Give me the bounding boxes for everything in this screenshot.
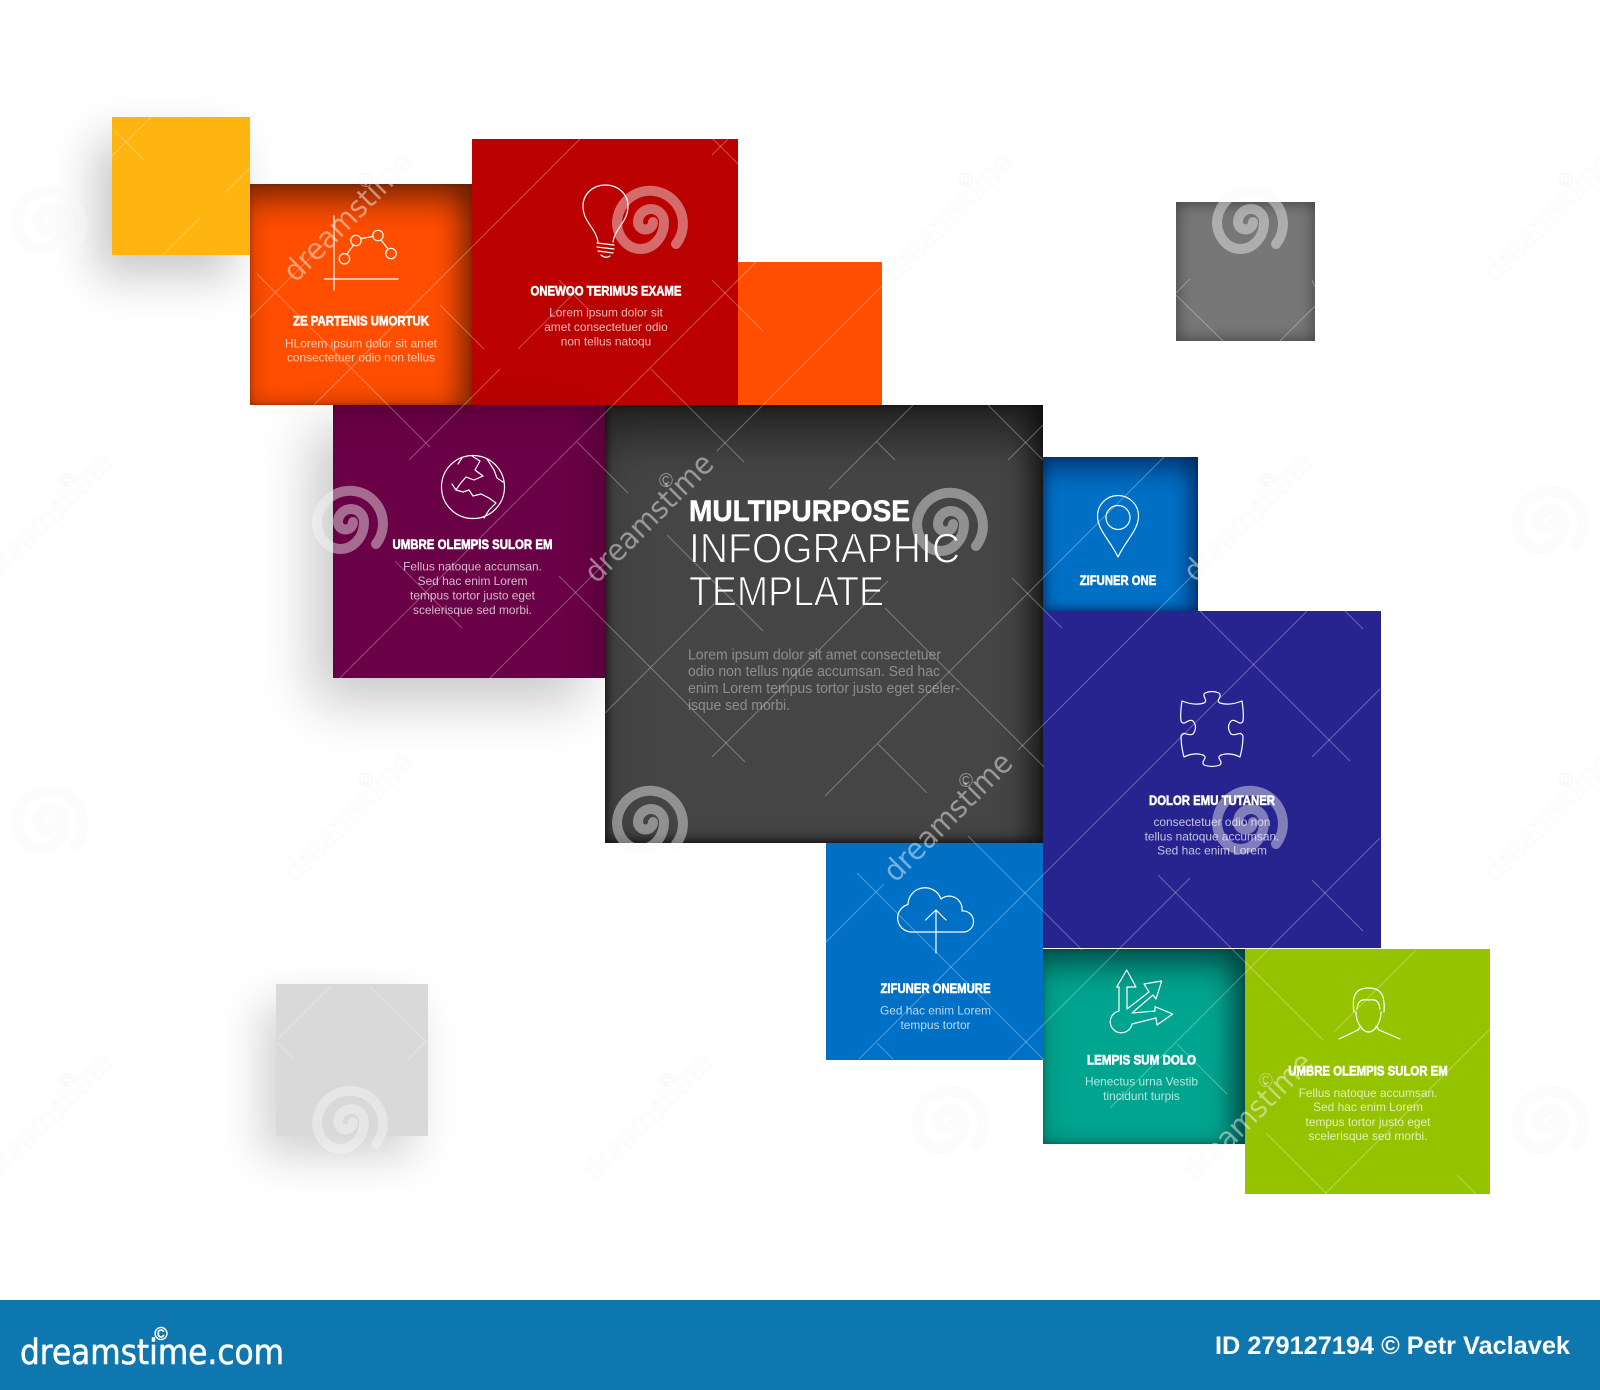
text block: green description: tempus tortor justo eget [1306,1115,1431,1129]
text block: purple description: Sed hac enim Lorem [418,574,527,588]
text block: teal description: tincidunt turpis [1103,1089,1180,1103]
text block: title description [688,648,960,714]
panel: dark title card [605,405,1043,843]
text block: orange description: HLorem ipsum dolor sit amet [285,336,438,350]
watermark overlay: © [59,471,73,492]
watermark overlay: © [359,771,373,792]
heading: main title [689,495,960,614]
heading: main title: TEMPLATE [689,568,884,614]
text block: purple description: scelerisque sed morbi. [413,603,532,617]
panel: dark gray square [1176,202,1315,341]
panel: yellow square [112,117,250,255]
icon: light bulb [583,185,628,257]
icon: puzzle piece [1181,692,1243,766]
text block: indigo description: tellus natoque accumsan. [1145,830,1279,844]
heading: umbre olempis sulor em: UMBRE OLEMPIS SULOR EM [392,537,552,552]
text block: cloud description: tempus tortor [900,1018,971,1032]
text block: purple description [403,560,542,617]
panel: orange data card [250,184,472,405]
text block: green description: scelerisque sed morbi. [1309,1129,1427,1143]
text block: orange description [285,336,438,364]
watermark overlay: © [1559,771,1573,792]
heading: zifuner onemure: ZIFUNER ONEMURE [880,981,990,996]
panel: blue cloud card [826,843,1043,1060]
panel: indigo puzzle card [1043,611,1381,948]
heading: umbre olempis sulor em: UMBRE OLEMPIS SULOR EM [1288,1064,1448,1078]
watermark overlay: © [659,471,673,492]
watermark overlay: dreamstime [1177,446,1320,589]
panel: green person card [1245,949,1490,1194]
watermark overlay: © [959,171,973,192]
heading: lempis sum dolo: LEMPIS SUM DOLO [1087,1052,1196,1068]
watermark overlay: dreamstime [877,146,1020,289]
text block: title description: isque sed morbi. [688,698,790,714]
footer image credit: ID 279127194 © Petr Vaclavek [1215,1332,1570,1360]
watermark overlay: © [359,171,373,192]
watermark overlay: © [959,771,973,792]
panel: red idea card [472,139,738,405]
heading: main title: INFOGRAPHIC [689,524,960,572]
text block: cloud description: Ged hac enim Lorem [880,1004,991,1018]
watermark overlay: © [59,1071,73,1092]
heading: dolor emu tutaner: DOLOR EMU TUTANER [1149,793,1275,808]
watermark overlay: © [1259,471,1273,492]
text block: indigo description: consectetuer odio non [1153,815,1271,829]
footer bar [0,1300,1600,1390]
text block: teal description [1085,1074,1198,1103]
footer logo: © [154,1324,168,1344]
panel: teal arrows card [1043,949,1245,1144]
watermark overlay: © [659,1071,673,1092]
icon: line chart [324,216,398,290]
text block: orange description: consectetuer odio non tellus [287,350,435,364]
text block: purple description: Fellus natoque accumsan. [403,560,542,574]
icon: globe [442,456,504,518]
watermark overlay: dreamstime [277,146,420,289]
heading: zifuner one: ZIFUNER ONE [1080,573,1156,588]
heading: main title: MULTIPURPOSE [689,495,910,528]
icon: person [1339,988,1400,1039]
text block: green description [1299,1086,1437,1143]
icon: map pin [1098,495,1138,557]
heading: ze partenis umortuk: ZE PARTENIS UMORTUK [293,314,429,328]
watermark overlay: © [1559,171,1573,192]
watermark overlay: © [1259,1071,1273,1092]
text block: red description: Lorem ipsum dolor sit [549,306,664,320]
text block: indigo description [1145,815,1279,858]
text block: green description: Fellus natoque accumsan. [1299,1086,1437,1100]
text block: teal description: Henectus urna Vestib [1085,1074,1198,1088]
text block: purple description: tempus tortor justo eget [410,588,536,602]
watermark overlay: dreamstime [577,1046,720,1189]
text block: cloud description [880,1004,991,1032]
text block: indigo description: Sed hac enim Lorem [1157,844,1267,858]
text block: green description: Sed hac enim Lorem [1313,1100,1423,1114]
watermark overlay: dreamstime [277,746,420,889]
icon: cloud upload [898,888,974,953]
footer logo: dreamstime.com [20,1333,284,1373]
text block: title description: enim Lorem tempus tortor justo eget sceler- [688,681,960,697]
watermark overlay: dreamstime [877,746,1020,889]
text block: title description: Lorem ipsum dolor sit amet consectetuer [688,648,941,664]
text block: red description: amet consectetuer odio [544,320,668,334]
panel: light gray square [276,984,428,1136]
text block: red description: non tellus natoqu [561,334,651,348]
watermark overlay: dreamstime [578,447,721,590]
heading: onewoo terimus exame: ONEWOO TERIMUS EXAME [530,284,682,298]
panel: blue location card [1043,457,1198,611]
panel: orange plain block [738,262,882,405]
text block: red description [544,306,668,348]
panel: purple globe card [333,405,605,678]
text block: title description: odio non tellus nque accumsan. Sed hac [688,664,940,680]
watermark overlay: dreamstime [1177,1046,1320,1189]
icon: branching arrows [1110,970,1173,1033]
